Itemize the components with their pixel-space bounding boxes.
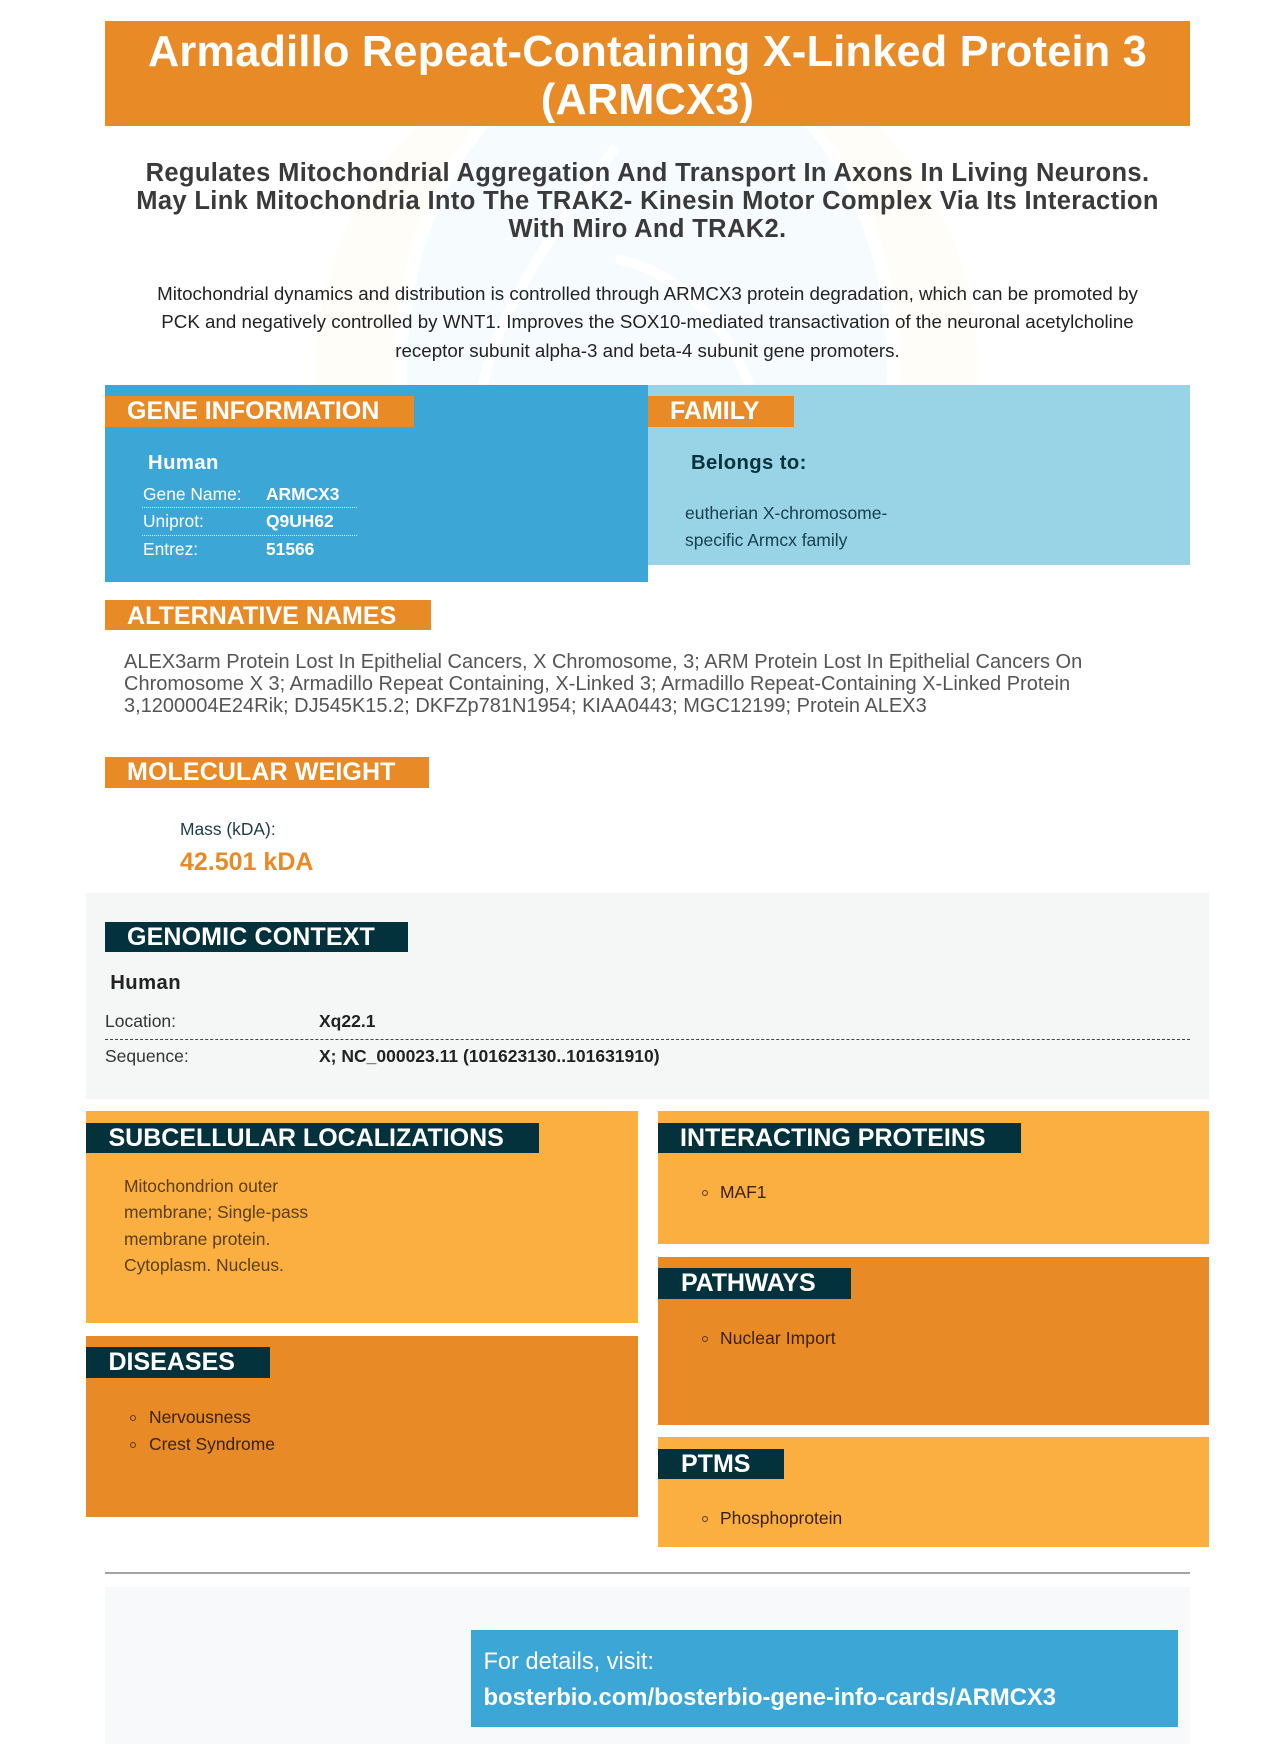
uniprot row: Uniprot: [143,511,204,531]
localization text [124,1176,308,1275]
heading: molecular weight: MOLECULAR WEIGHT [127,758,396,786]
entrez row: 51566 [266,539,314,559]
heading: diseases [86,1347,270,1378]
localization text: membrane protein. [124,1229,270,1249]
sequence row: Sequence: [105,1046,189,1066]
heading: family: FAMILY [670,397,759,425]
location row [105,1011,375,1031]
heading: diseases: DISEASES [108,1348,235,1376]
list item: MAF1: MAF1 [720,1182,767,1202]
species label: Human [110,972,181,994]
species label: Human [148,452,219,474]
heading: pathways [658,1268,851,1299]
title banner: Armadillo Repeat-Containing X-Linked Protein 3 [148,28,1147,76]
subtitle summary [136,159,1159,243]
panel: diseases [86,1336,638,1517]
gene name row: ARMCX3 [266,484,339,504]
gene name row: Gene Name: [143,484,242,504]
details URL: bosterbio.com/bosterbio-gene-info-cards/ARMCX3 [484,1684,1056,1711]
family description: eutherian X-chromosome- [685,503,887,523]
gene name row [143,484,339,504]
panel: family [648,385,1190,565]
section: alternative names [105,600,1082,717]
list item: crest syndrome: Crest Syndrome [149,1434,275,1454]
sequence row [105,1046,660,1066]
uniprot row [143,511,334,531]
heading: pathways: PATHWAYS [681,1269,815,1297]
heading: family [648,396,794,427]
callout: details link [471,1630,1178,1727]
heading: genomic context: GENOMIC CONTEXT [127,923,375,951]
panel: footer [105,1587,1190,1744]
panel: pathways [658,1257,1209,1425]
description paragraph: receptor subunit alpha-3 and beta-4 subunit gene promoters. [395,340,900,361]
panel: gene information [105,385,648,582]
sequence row: X; NC_000023.11 (101623130..101631910) [319,1046,660,1066]
list item: nervousness: Nervousness [149,1407,251,1427]
background watermark logo [407,126,887,385]
description paragraph [157,283,1138,361]
list item: phosphoprotein: Phosphoprotein [720,1508,842,1528]
belongs to label: Belongs to: [691,452,807,474]
uniprot row: Q9UH62 [266,511,334,531]
location row: Location: [105,1011,176,1031]
heading: subcellular localizations: SUBCELLULAR LOCALIZATIONS [108,1124,504,1152]
family description [685,503,887,550]
panel: interacting proteins [658,1111,1209,1244]
heading: alternative names: ALTERNATIVE NAMES [127,602,396,630]
entrez row: Entrez: [143,539,198,559]
description paragraph: Mitochondrial dynamics and distribution is controlled through ARMCX3 protein degradation, which can be promoted by [157,283,1138,304]
title banner [105,21,1190,126]
heading: interacting proteins: INTERACTING PROTEINS [680,1124,986,1152]
description paragraph: PCK and negatively controlled by WNT1. Improves the SOX10-mediated transactivation of the neuronal acetylcholine [161,311,1134,332]
section: molecular weight [105,757,429,876]
heading: gene information: GENE INFORMATION [127,397,379,425]
alternative names text [124,651,1082,717]
localization text: membrane; Single-pass [124,1202,308,1222]
subtitle summary: With Miro And TRAK2. [508,215,786,243]
details label: For details, visit: [484,1649,654,1675]
alternative names text: ALEX3arm Protein Lost In Epithelial Cancers, X Chromosome, 3; ARM Protein Lost In Epithelial Cancers On [124,651,1082,673]
list item: nuclear import: Nuclear Import [720,1328,836,1348]
panel: subcellular localizations [86,1111,638,1323]
panel: PTMs [658,1437,1209,1547]
heading: PTMs [658,1449,784,1479]
family description: specific Armcx family [685,530,847,550]
location row: Xq22.1 [319,1011,375,1031]
localization text: Cytoplasm. Nucleus. [124,1255,284,1275]
subtitle summary: May Link Mitochondria Into The TRAK2- Kinesin Motor Complex Via Its Interaction [136,187,1159,215]
panel: genomic context [86,893,1209,1099]
mass value: 42.501 kDA [180,848,313,876]
localization text: Mitochondrion outer [124,1176,278,1196]
entrez row [143,539,314,559]
heading: PTMs: PTMS [681,1450,750,1478]
subtitle summary: Regulates Mitochondrial Aggregation And Transport In Axons In Living Neurons. [146,159,1149,187]
title banner: (ARMCX3) [541,76,754,124]
alternative names text: Chromosome X 3; Armadillo Repeat Containing, X-Linked 3; Armadillo Repeat-Containing X-Linked Protein [124,673,1070,695]
alternative names text: 3,1200004E24Rik; DJ545K15.2; DKFZp781N1954; KIAA0443; MGC12199; Protein ALEX3 [124,695,927,717]
mass label: Mass (kDA): [180,819,276,839]
